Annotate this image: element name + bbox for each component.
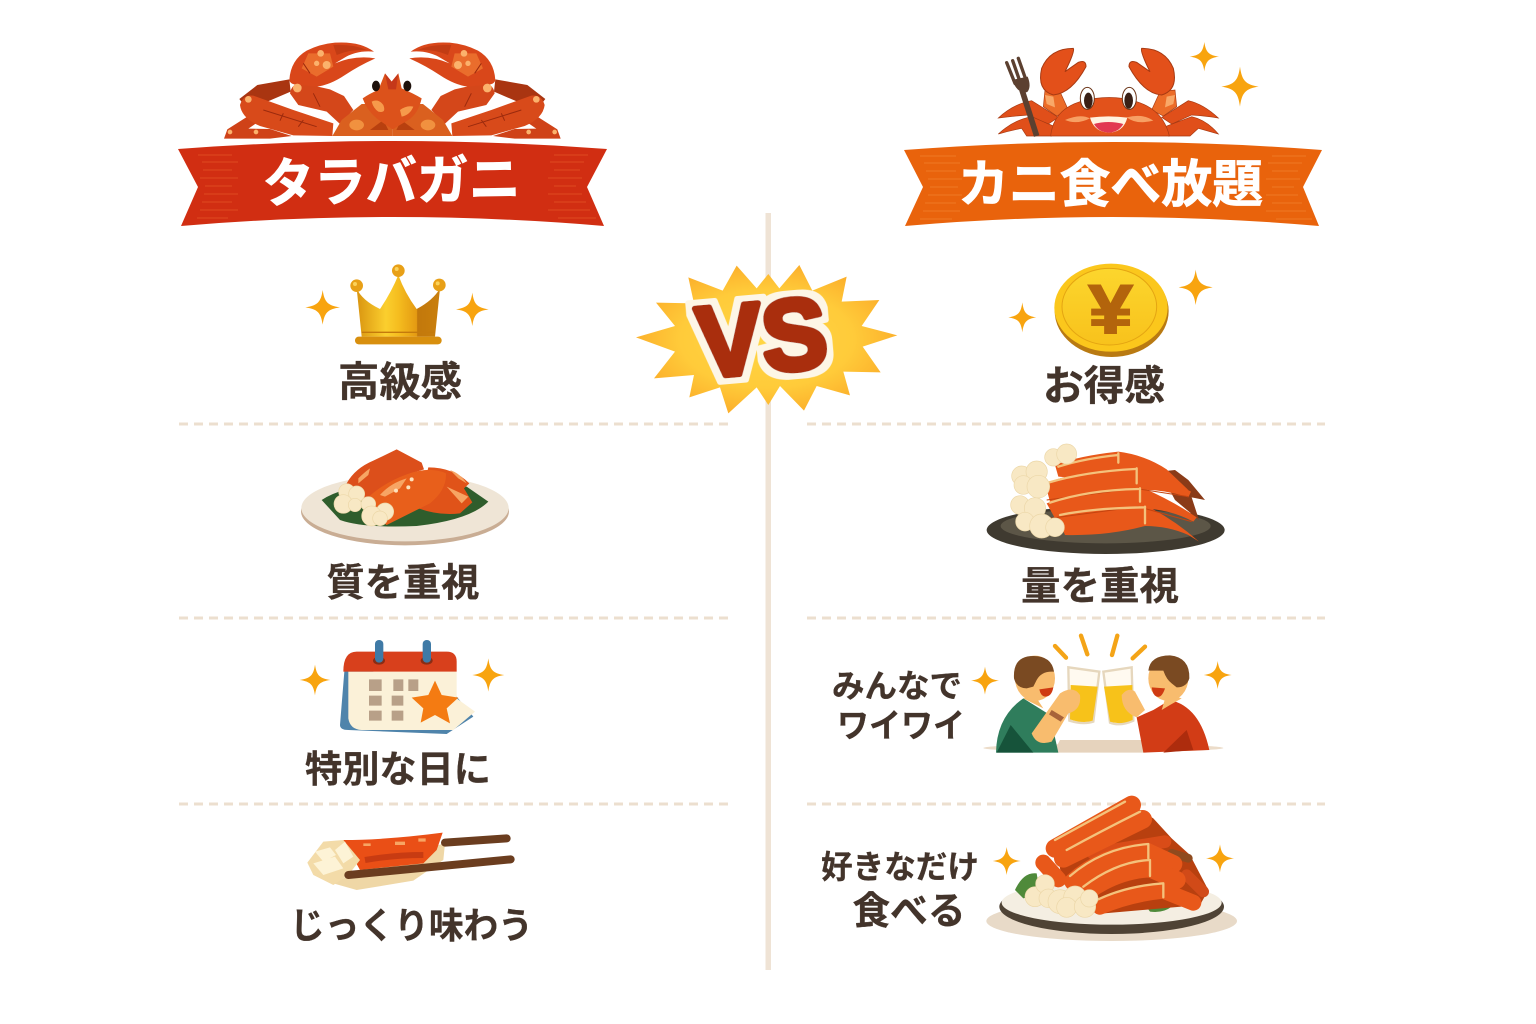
icon: calendar with star <box>300 640 504 734</box>
icon: king crab <box>224 42 561 139</box>
label: 食べる: 食べる <box>852 891 966 933</box>
panel: タラバガニ header <box>178 42 607 226</box>
row 2 left: 質を重視 <box>301 449 509 605</box>
icon: crab on white plate <box>301 449 509 545</box>
label: 高級感: 高級感 <box>338 359 462 405</box>
row 4 left: じっくり味わう <box>290 833 533 946</box>
title: カニ食べ放題: カニ食べ放題 <box>958 156 1263 213</box>
icon: crab legs on dark plate <box>987 444 1225 554</box>
label: 好きなだけ: 好きなだけ <box>821 849 979 885</box>
row 4 right: 好きなだけ食べる <box>821 802 1237 941</box>
label: 質を重視: 質を重視 <box>326 562 480 605</box>
icon: yen coin with sparkles <box>1008 264 1213 357</box>
row 3 left: 特別な日に <box>300 640 504 790</box>
icon: two people clinking beer mugs <box>971 636 1232 753</box>
row 1 left: 高級感 <box>305 264 489 405</box>
row 2 right: 量を重視 <box>987 444 1225 609</box>
label: ワイワイ: ワイワイ <box>837 707 965 744</box>
VS text: VS <box>692 277 831 399</box>
panel: カニ食べ放題 header <box>904 42 1322 226</box>
label: じっくり味わう: じっくり味わう <box>290 905 533 946</box>
VS starburst badge <box>636 265 897 413</box>
row 1 right: お得感 <box>1008 264 1213 409</box>
icon: crown with sparkles <box>305 264 489 344</box>
label: 特別な日に: 特別な日に <box>305 749 491 790</box>
ribbon: カニ食べ放題 <box>904 142 1322 226</box>
label: 量を重視: 量を重視 <box>1021 565 1179 609</box>
icon: cartoon crab with fork <box>998 42 1259 136</box>
icon: yen coin with sparkles: ¥ <box>1089 272 1133 348</box>
icon: heaped crab legs on plate <box>986 802 1237 941</box>
label: お得感: お得感 <box>1043 363 1165 409</box>
center divider <box>766 213 771 970</box>
ribbon: タラバガニ <box>178 141 607 226</box>
icon: crab held by chopsticks <box>307 833 511 890</box>
label: みんなで: みんなで <box>832 668 962 704</box>
title: タラバガニ: タラバガニ <box>262 151 521 214</box>
row 3 right: みんなでワイワイ <box>832 636 1232 753</box>
